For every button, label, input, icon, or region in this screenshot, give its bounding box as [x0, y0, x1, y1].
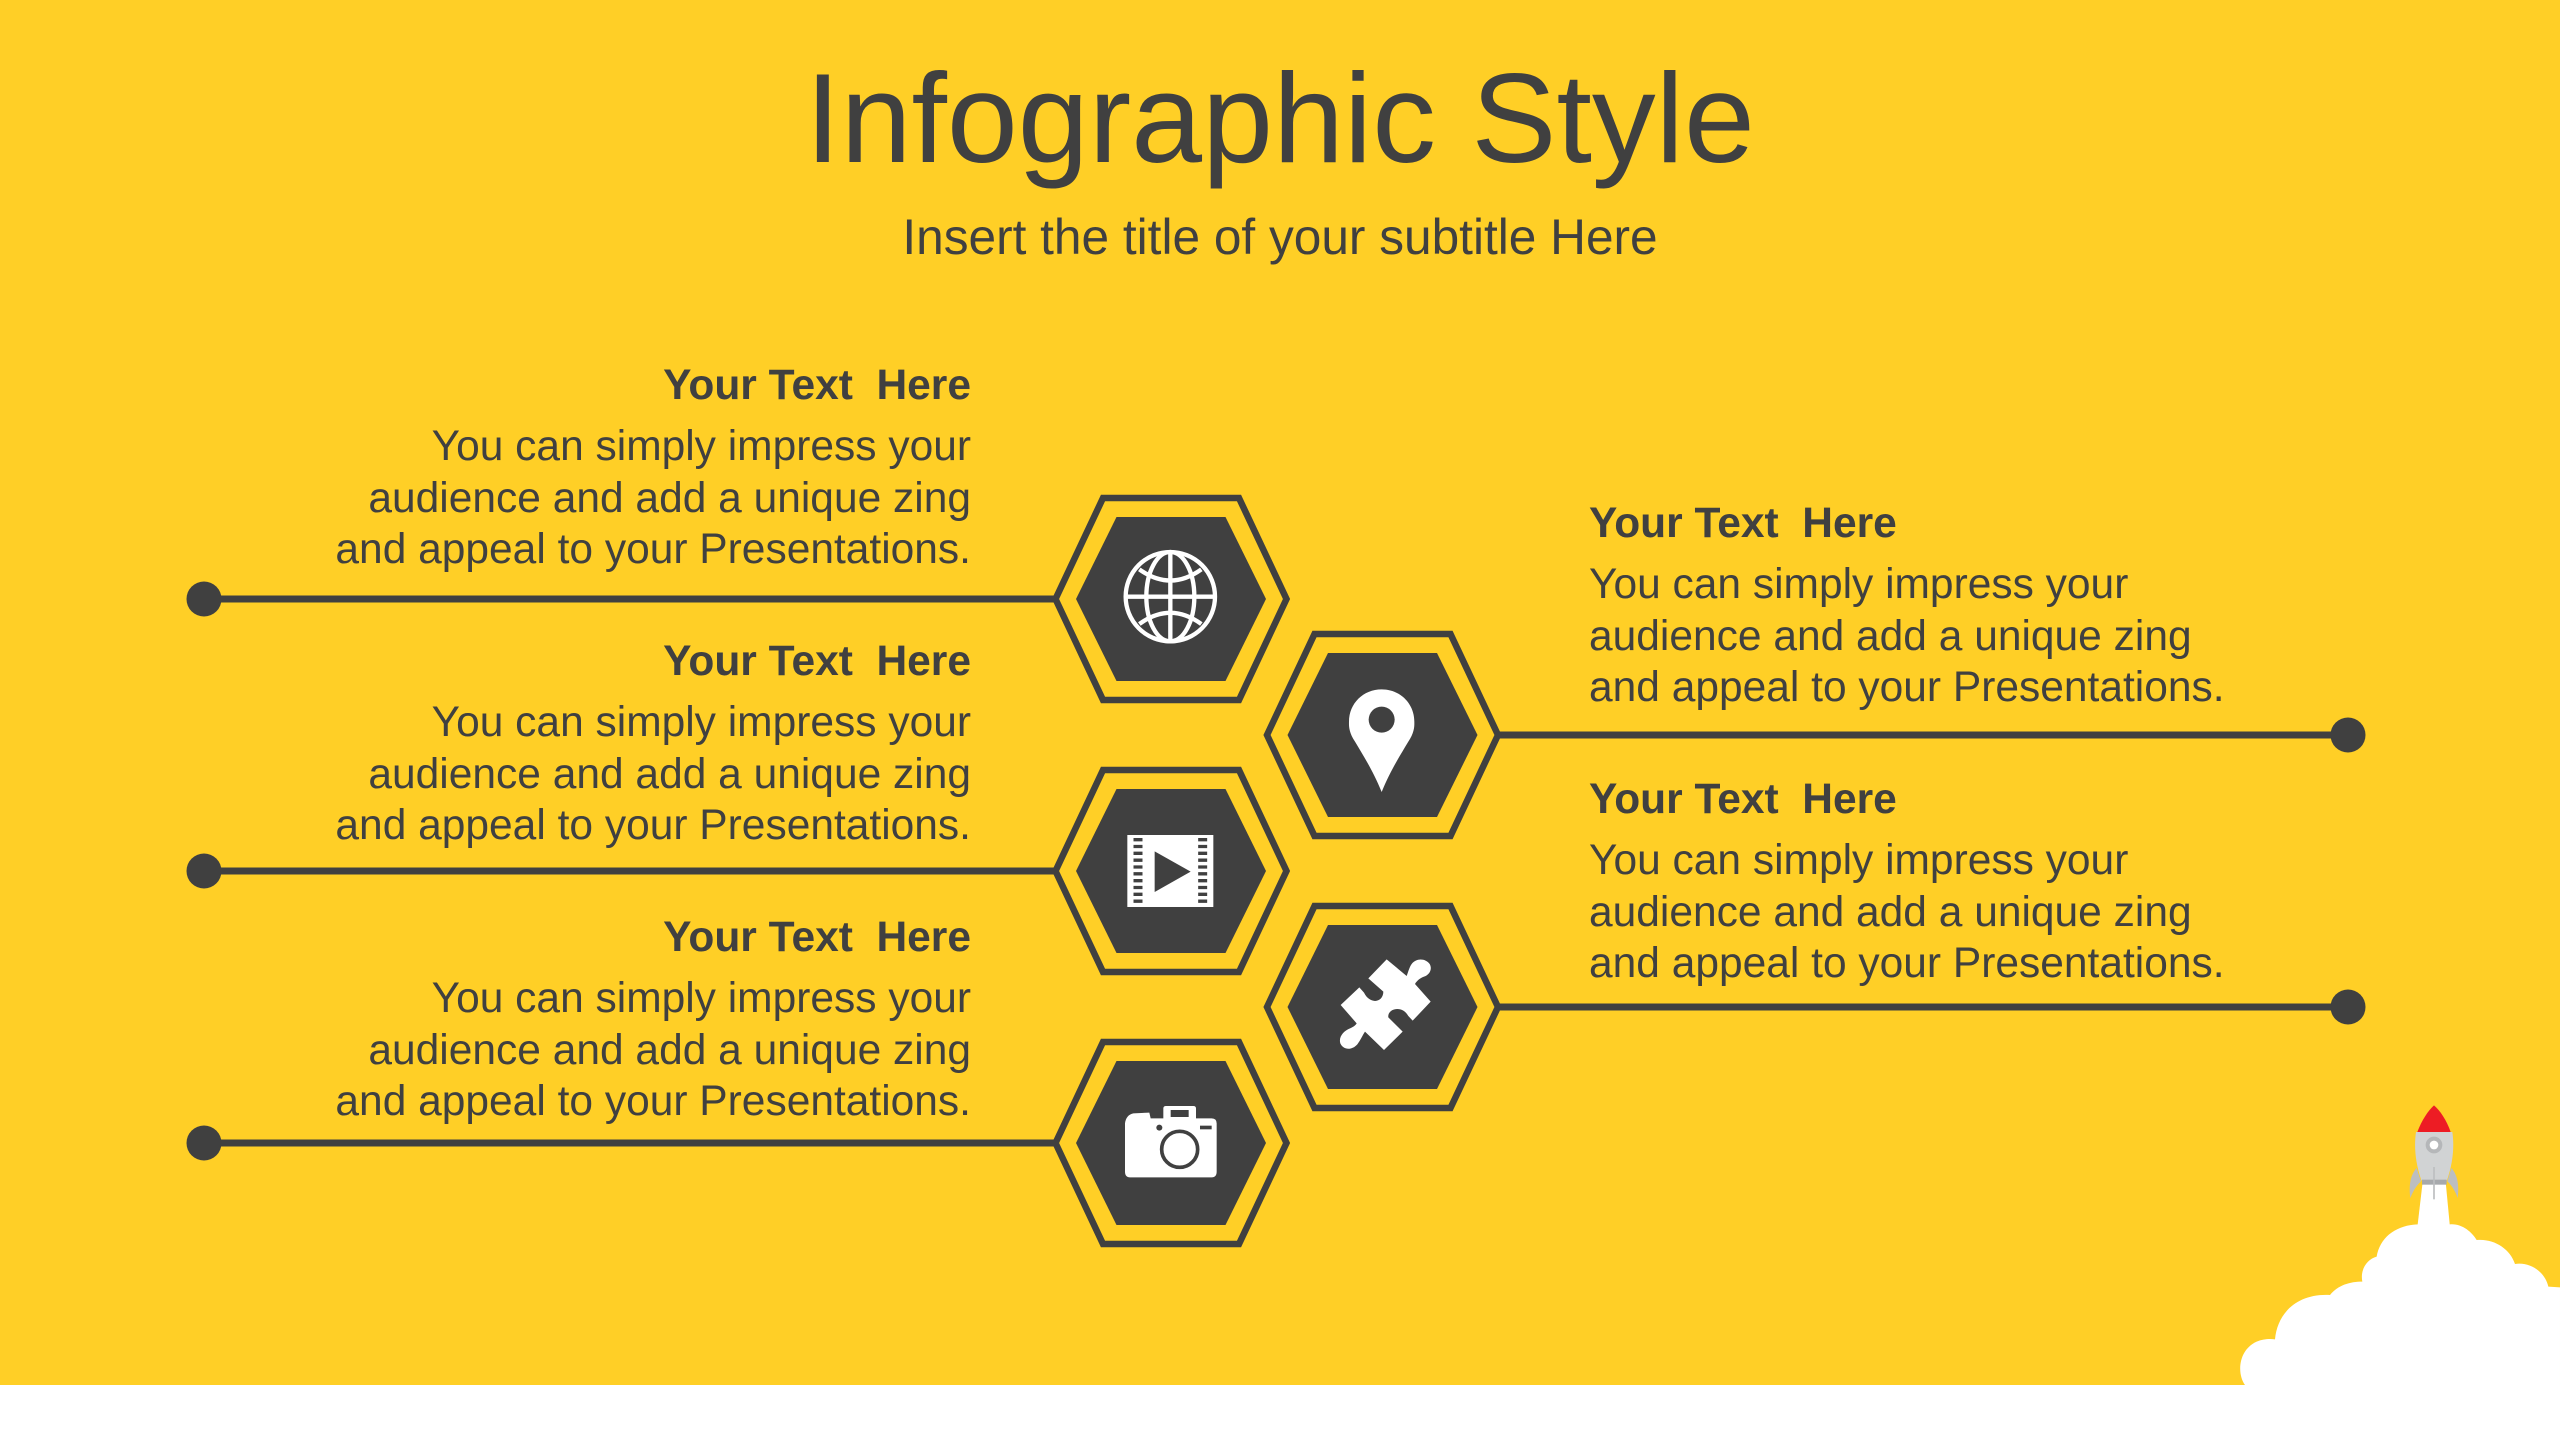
icon: film play: [1127, 835, 1213, 907]
text block: left 2: and appeal to your Presentations.: [335, 802, 971, 849]
text block: left 3: [335, 914, 971, 1125]
text block: left 1: [335, 362, 971, 573]
text block: left 1: audience and add a unique zing: [368, 475, 971, 522]
text block: right 2: Your Text Here: [1589, 776, 1897, 823]
connector: left 1: [186, 582, 1056, 616]
text block: left 3: Your Text Here: [663, 914, 971, 961]
text block: right 1: and appeal to your Presentations.: [1589, 664, 2225, 711]
text block: right 1: You can simply impress your: [1589, 561, 2128, 608]
text block: left 1: You can simply impress your: [432, 423, 971, 470]
text block: left 2: Your Text Here: [663, 638, 971, 685]
text block: left 2: audience and add a unique zing: [368, 751, 971, 798]
rocket flame: [2417, 1182, 2450, 1227]
connector: right 1: [1498, 718, 2366, 752]
hexagon: location pin: [1267, 634, 1498, 836]
hexagon: video: [1056, 770, 1286, 972]
text block: right 1: audience and add a unique zing: [1589, 613, 2192, 660]
icon: location pin: [1349, 689, 1414, 792]
text block: left 2: [335, 638, 971, 849]
icon: camera: [1125, 1106, 1217, 1177]
text block: right 2: and appeal to your Presentations.: [1589, 940, 2225, 987]
icon: globe: [1125, 552, 1215, 642]
hexagon: globe: [1056, 498, 1286, 700]
text block: right 2: audience and add a unique zing: [1589, 889, 2192, 936]
hexagon: puzzle: [1267, 906, 1498, 1108]
text block: left 3: You can simply impress your: [432, 975, 971, 1022]
icon: puzzle piece: [1340, 959, 1431, 1050]
text block: right 2: [1589, 776, 2225, 987]
text block: right 1: [1589, 500, 2225, 711]
text block: right 1: Your Text Here: [1589, 500, 1897, 547]
connector: left 2: [186, 854, 1056, 888]
subtitle: Insert the title of your subtitle Here: [902, 209, 1658, 265]
cloud: [2240, 1224, 2560, 1385]
text block: right 2: You can simply impress your: [1589, 837, 2128, 884]
text block: left 1: and appeal to your Presentations.: [335, 526, 971, 573]
hexagon: camera: [1056, 1042, 1286, 1244]
text block: left 3: audience and add a unique zing: [368, 1027, 971, 1074]
rocket: [2410, 1105, 2458, 1227]
connector: left 3: [186, 1126, 1056, 1160]
text block: left 1: Your Text Here: [663, 362, 971, 409]
title: Infographic Style: [805, 48, 1755, 190]
connector: right 2: [1498, 990, 2366, 1024]
text block: left 3: and appeal to your Presentations.: [335, 1078, 971, 1125]
text block: left 2: You can simply impress your: [432, 699, 971, 746]
